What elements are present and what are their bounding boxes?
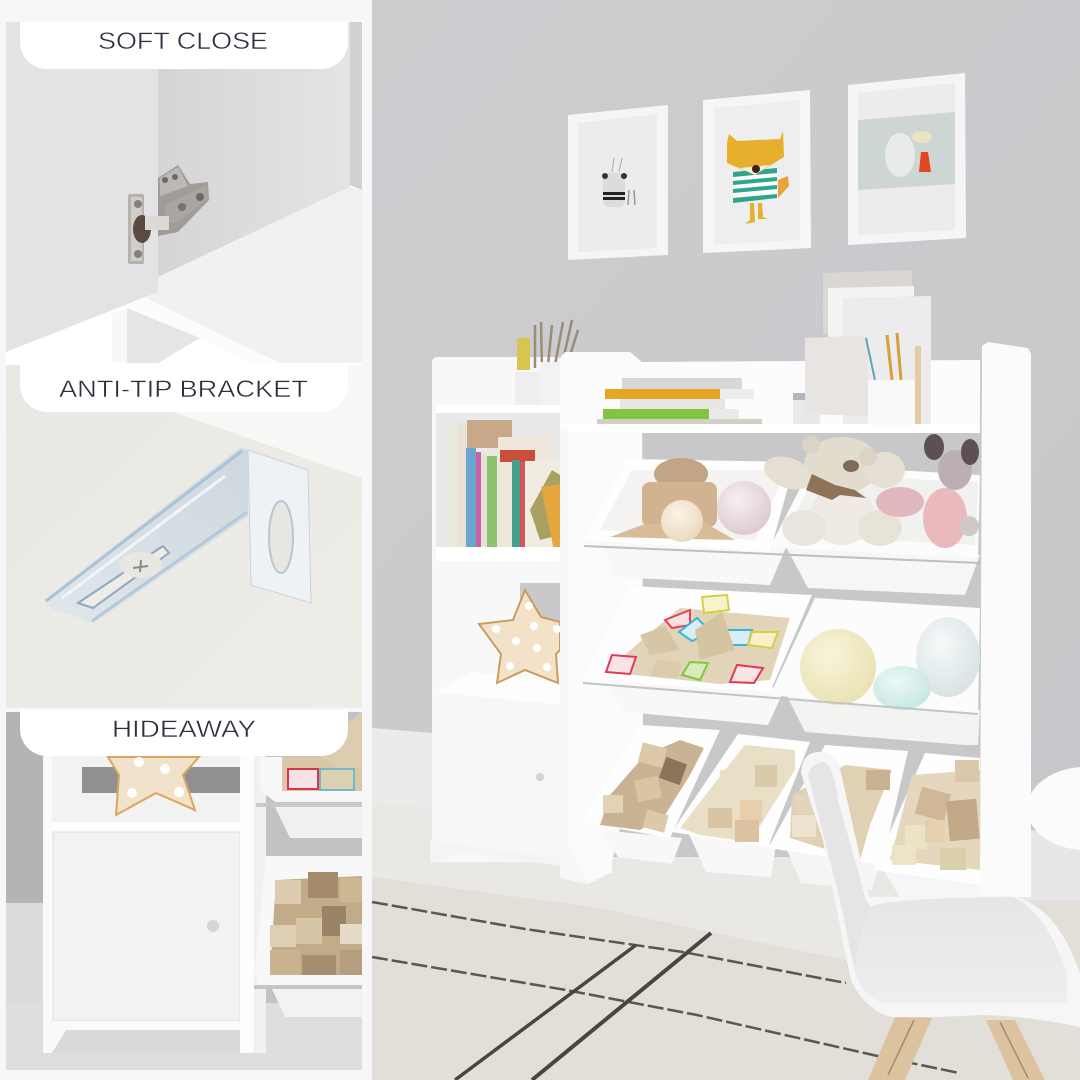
framed picture: panda <box>568 105 668 260</box>
bin row 1 right <box>759 434 980 595</box>
hinge <box>128 165 209 264</box>
plush elephant <box>876 434 979 548</box>
books bay <box>436 413 561 551</box>
panel: soft close <box>6 22 362 365</box>
left middle shelf <box>436 547 561 561</box>
right post <box>980 342 1031 897</box>
star lamp <box>479 590 561 683</box>
framed picture: fox <box>703 90 811 253</box>
label: hideaway <box>20 710 348 756</box>
bin row 3 third <box>768 745 908 890</box>
baseboard <box>372 728 432 808</box>
seat inner <box>855 897 1067 1003</box>
card and pencil cup <box>805 333 921 425</box>
top shelf books <box>597 378 762 424</box>
label: hideaway: HIDEAWAY <box>112 716 256 743</box>
room scene <box>372 0 1080 1080</box>
bin row 1 left <box>585 458 795 585</box>
panel: anti-tip bracket <box>6 365 362 708</box>
alphabet blocks <box>606 595 790 684</box>
top back board <box>640 360 980 425</box>
label: anti-tip bracket <box>20 365 348 412</box>
bracket <box>44 448 311 623</box>
bin rail row 2 <box>583 683 978 714</box>
right baseboard <box>1031 830 1080 905</box>
door panel <box>6 22 158 352</box>
bin row 2 right <box>770 598 980 745</box>
chair back inner <box>808 762 871 973</box>
label: soft close: SOFT CLOSE <box>98 28 268 55</box>
panel: hideaway <box>6 712 362 1070</box>
round side table <box>1027 767 1080 850</box>
chair back and seat shell <box>801 752 1080 1027</box>
star lamp <box>108 757 199 815</box>
left pencil cups <box>515 320 578 405</box>
top shelf <box>568 424 980 433</box>
bin rail row 1 <box>584 546 980 563</box>
star bay back <box>520 583 561 626</box>
jar <box>793 393 820 424</box>
papers on top shelf <box>823 270 931 425</box>
cabinet base and legs <box>430 840 561 866</box>
framed picture: bear and girl <box>848 73 966 245</box>
rug <box>372 877 1080 1080</box>
bin row 2 left <box>583 586 812 725</box>
floor <box>372 803 1080 1080</box>
bin row 3 first <box>582 725 720 864</box>
center post front edge <box>560 430 588 884</box>
chair legs <box>868 1015 1045 1080</box>
chair <box>801 752 1080 1080</box>
label: soft close <box>20 22 348 69</box>
center post <box>560 352 643 884</box>
lower bin with blocks <box>254 856 362 1017</box>
upper bin with blocks <box>256 712 362 838</box>
wall <box>372 0 1080 880</box>
bin row 3 second <box>672 734 810 877</box>
left unit back <box>432 357 562 862</box>
wall seen behind bins <box>612 432 982 857</box>
bin row 3 fourth <box>873 753 980 897</box>
cabinet top ledge <box>436 672 561 705</box>
teddy bear <box>759 436 905 546</box>
cabinet door <box>435 693 561 858</box>
label: anti-tip bracket: ANTI-TIP BRACKET <box>59 376 308 403</box>
cabinet <box>43 756 266 1053</box>
wooden toy <box>610 458 735 540</box>
left upper shelf <box>436 405 561 413</box>
